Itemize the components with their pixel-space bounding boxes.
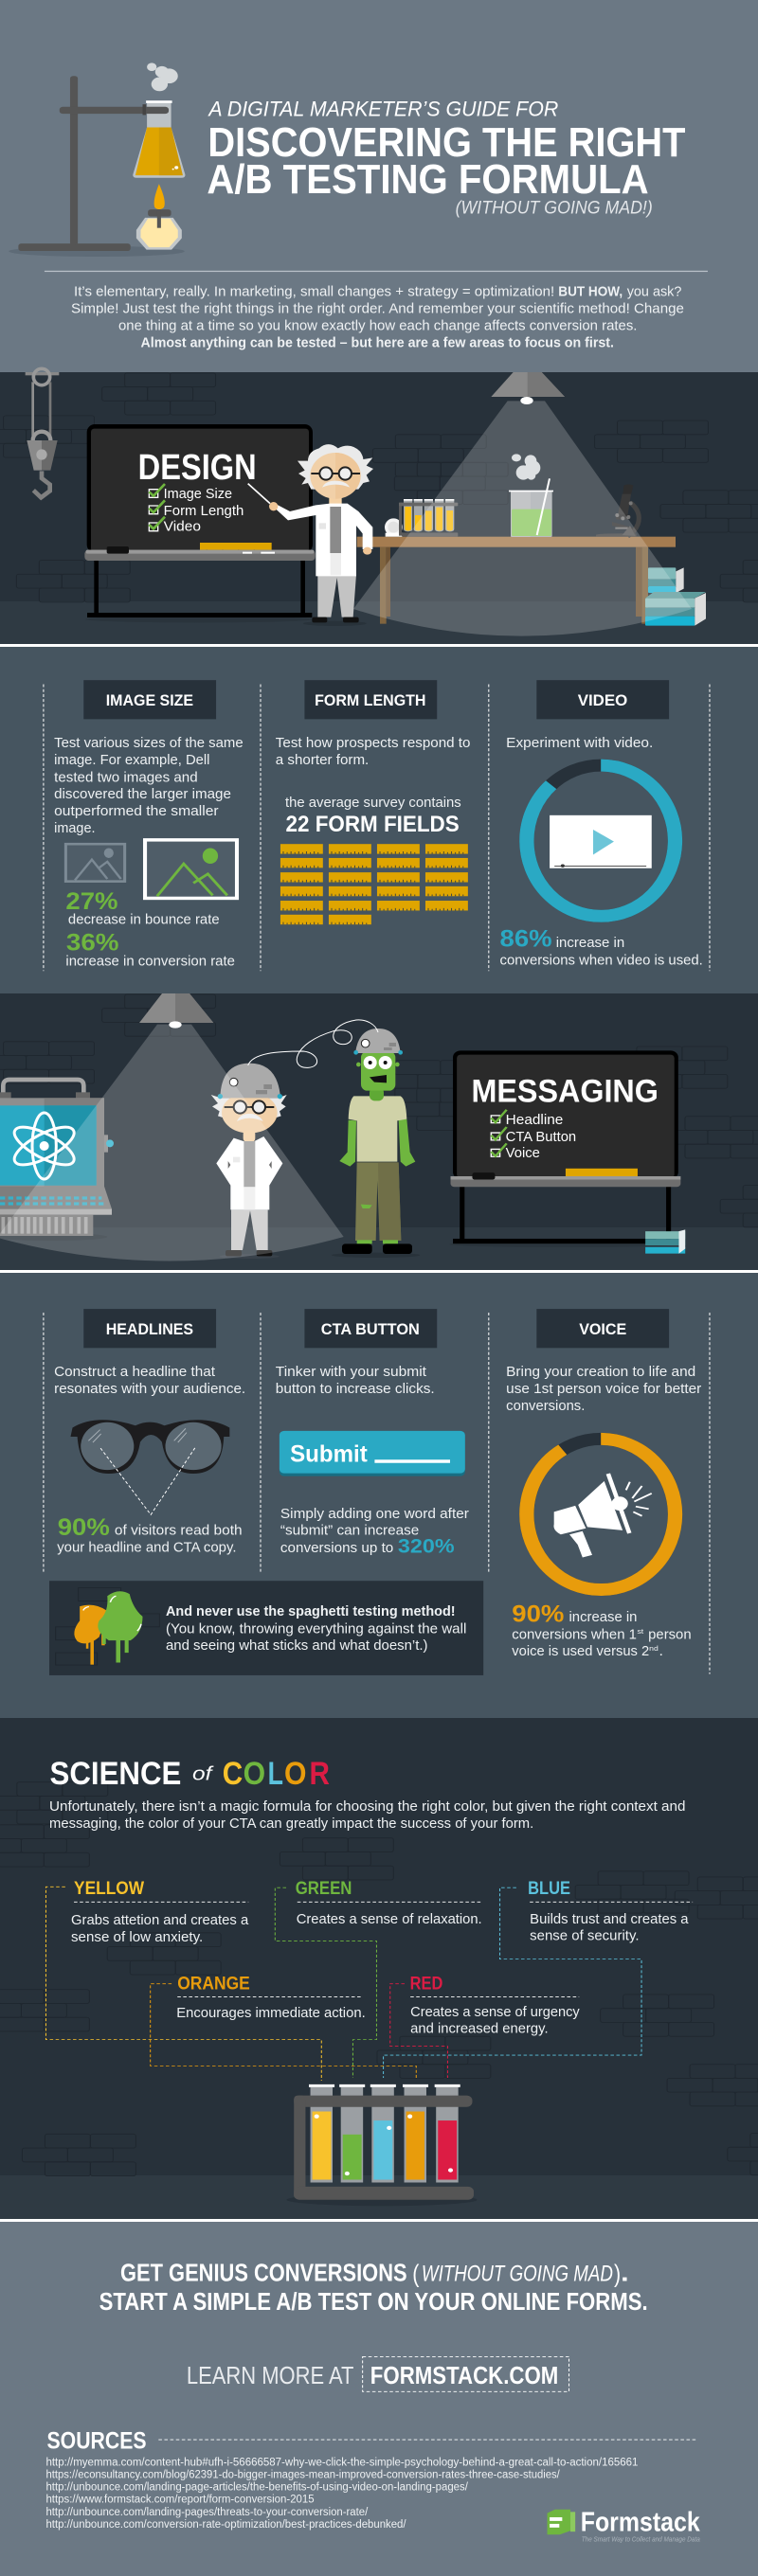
card: headlines xyxy=(54,1309,245,1555)
heading: science of color: R xyxy=(310,1756,330,1792)
card: image size: IMAGE SIZE xyxy=(106,690,193,709)
intro text: Simple! Just test the right things in the right order. And remember your scientific method! Change xyxy=(71,302,684,316)
scene: lab table, lamp and light xyxy=(353,372,706,636)
computer with atom screen xyxy=(0,1080,114,1241)
label: blue xyxy=(528,1879,693,1943)
color intro text: messaging, the color of your CTA can greatly impact the success of your form. xyxy=(49,1816,533,1832)
label: green xyxy=(296,1879,482,1927)
dashed column dividers xyxy=(44,1313,710,1674)
connector lines xyxy=(45,1887,641,2081)
label: red: Creates a sense of urgency xyxy=(410,2005,580,2020)
card: image size xyxy=(54,680,244,969)
intro text xyxy=(71,285,684,350)
card: voice: conversions. xyxy=(506,1399,585,1413)
icon: paint splats xyxy=(74,1591,143,1665)
label: yellow xyxy=(71,1879,249,1945)
title: A DIGITAL MARKETER’S GUIDE FOR xyxy=(208,98,558,121)
callout: spaghetti testing: And never use the spaghetti testing method! xyxy=(166,1604,456,1619)
science of color bricks xyxy=(0,1782,758,2176)
blackboard: design xyxy=(84,424,316,622)
card: video xyxy=(500,680,703,968)
intro text: It’s elementary, really. In marketing, small changes + strategy = optimization! xyxy=(74,285,554,299)
color intro text: Unfortunately, there isn’t a magic formula for choosing the right color, but given the right context and xyxy=(49,1799,685,1815)
card: cta button xyxy=(276,1309,469,1557)
sources: https://econsultancy.com/blog/62391-do-bigger-images-mean-improved-conversion-rates-three-case-studies/ xyxy=(45,2467,560,2480)
label: green: Creates a sense of relaxation. xyxy=(297,1912,482,1927)
ruler grid: 22 form fields xyxy=(280,844,468,924)
callout: spaghetti testing: (You know, throwing everything against the wall xyxy=(166,1621,466,1637)
learn more link: FORMSTACK.COM xyxy=(370,2362,558,2389)
icon: microscope xyxy=(596,484,639,537)
icon: flask on burner stand xyxy=(9,63,185,257)
blackboard: design: Video xyxy=(164,519,201,535)
card: image size: outperformed the smaller xyxy=(54,804,219,819)
icon: books xyxy=(645,1229,685,1254)
card: headlines: resonates with your audience. xyxy=(54,1382,245,1397)
title xyxy=(207,98,686,218)
label: yellow: sense of low anxiety. xyxy=(71,1930,203,1945)
card: voice xyxy=(506,1309,701,1659)
card: headlines: of visitors read both xyxy=(115,1524,243,1538)
label: blue: BLUE xyxy=(528,1879,570,1899)
call to action: WITHOUT GOING MAD xyxy=(422,2261,613,2286)
card: voice: voice is used versus 2 xyxy=(512,1644,649,1659)
sources: http://unbounce.com/landing-page-articles/the-benefits-of-using-video-on-landing-pages/ xyxy=(45,2479,468,2493)
card: image size: 36% xyxy=(66,929,119,956)
card: voice: VOICE xyxy=(579,1319,626,1338)
icon: small image xyxy=(65,844,125,882)
panel: messaging tests xyxy=(0,1309,758,2176)
sources: https://www.formstack.com/report/form-conversion-2015 xyxy=(45,2492,315,2505)
label: blue: sense of security. xyxy=(530,1929,639,1943)
card: image size: image. For example, Dell xyxy=(54,753,209,768)
logo: formstack xyxy=(548,2507,700,2543)
card: video: 86% xyxy=(500,925,552,952)
card: image size: 27% xyxy=(65,887,117,915)
test tube rack xyxy=(287,2084,478,2206)
card: voice: . xyxy=(659,1644,663,1659)
label: orange: ORANGE xyxy=(177,1974,250,1994)
test tubes on table xyxy=(399,499,458,537)
heading: science of color: O xyxy=(244,1756,265,1792)
learn more link: LEARN MORE AT xyxy=(187,2362,353,2389)
call to action: GET GENIUS CONVERSIONS xyxy=(120,2260,407,2287)
heading: science of color: C xyxy=(223,1756,243,1792)
card: headlines: 90% xyxy=(58,1513,110,1541)
header panel xyxy=(0,63,758,602)
label: red xyxy=(410,1974,580,2036)
card: cta button: 320% xyxy=(398,1534,455,1557)
card: video: Experiment with video. xyxy=(506,736,653,751)
icon: large image xyxy=(145,840,237,898)
card: voice: st xyxy=(637,1628,644,1636)
scientist with helmet xyxy=(211,1064,287,1259)
card: voice: 90% xyxy=(512,1601,564,1627)
card: image size: tested two images and xyxy=(54,770,198,785)
card: voice: conversions when 1 xyxy=(512,1627,637,1642)
card: image size: decrease in bounce rate xyxy=(68,912,220,927)
blackboard: messaging: Headline xyxy=(506,1111,563,1128)
panel: design tests xyxy=(0,680,758,1254)
card: headlines: Construct a headline that xyxy=(54,1365,216,1379)
blackboard: messaging: Voice xyxy=(506,1144,540,1161)
call to action: . xyxy=(621,2260,629,2287)
icon: atom xyxy=(9,1113,80,1179)
wires xyxy=(248,1020,378,1067)
card: voice: use 1st person voice for better xyxy=(506,1382,701,1397)
label: red: and increased energy. xyxy=(410,2022,549,2036)
heading: science of color: O xyxy=(284,1756,306,1792)
donut chart: 90% xyxy=(527,1439,676,1590)
heading: science of color xyxy=(50,1756,330,1792)
callout: spaghetti testing xyxy=(49,1581,483,1675)
icon: pulley hook xyxy=(26,368,59,497)
label: yellow: Grabs attetion and creates a xyxy=(71,1913,249,1928)
donut chart: 86% xyxy=(527,765,675,916)
icon: glasses xyxy=(70,1420,229,1514)
label: orange: Encourages immediate action. xyxy=(176,2006,366,2020)
submit button xyxy=(280,1431,465,1476)
logo: formstack: Formstack xyxy=(581,2507,700,2537)
zombie xyxy=(332,1029,420,1258)
card: cta button: “submit” can increase xyxy=(280,1524,419,1538)
logo: formstack: The Smart Way to Collect and Manage Data xyxy=(582,2535,700,2543)
blackboard: design: DESIGN xyxy=(138,448,257,488)
card: image size: increase in conversion rate xyxy=(65,955,235,969)
card: voice: Bring your creation to life and xyxy=(506,1365,695,1379)
scene: blackboard and scientist xyxy=(26,368,373,626)
scientist pointing xyxy=(248,444,373,626)
dashed column dividers xyxy=(44,684,710,971)
beaker with steam xyxy=(509,454,553,537)
callout: spaghetti testing: and seeing what sticks and what doesn’t.) xyxy=(166,1638,428,1654)
intro text: BUT HOW, xyxy=(558,285,623,299)
scene: messaging lab bricks xyxy=(0,994,758,1227)
card: form length: the average survey contains xyxy=(285,796,461,811)
label: orange xyxy=(176,1974,366,2020)
heading: science of color: L xyxy=(268,1756,283,1792)
card: cta button: CTA BUTTON xyxy=(321,1319,420,1338)
card: form length xyxy=(276,680,471,924)
card: image size: image. xyxy=(54,821,96,836)
card: form length: Test how prospects respond to xyxy=(276,736,471,751)
icon: desk clock xyxy=(385,518,403,537)
heading: science of color: SCIENCE xyxy=(50,1756,181,1792)
sources: http://myemma.com/content-hub#ufh-i-56666587-why-we-click-the-simple-psychology-behind-a-great-call-to-action/165661 xyxy=(45,2455,638,2468)
sources: http://unbounce.com/landing-pages/threats-to-your-conversion-rate/ xyxy=(45,2505,369,2518)
blackboard: design: Image Size xyxy=(164,486,232,502)
card: cta button: Tinker with your submit xyxy=(276,1365,427,1379)
card: image size: discovered the larger image xyxy=(54,787,231,802)
icon: megaphone xyxy=(553,1474,652,1557)
panel: color lab and footer xyxy=(45,1887,700,2543)
card: voice: nd xyxy=(649,1645,659,1653)
intro text: one thing at a time so you know exactly how each change affects conversion rates. xyxy=(118,319,637,333)
call to action: ) xyxy=(614,2261,621,2288)
card: voice: person xyxy=(648,1627,692,1642)
card: headlines: HEADLINES xyxy=(106,1319,193,1338)
blackboard: messaging: MESSAGING xyxy=(471,1073,659,1110)
scene: computer, scientist and zombie xyxy=(0,993,420,1261)
scene: design lab bricks xyxy=(0,373,758,602)
card: headlines: your headline and CTA copy. xyxy=(57,1541,236,1555)
lamp and light cone xyxy=(0,993,344,1261)
card: voice: increase in xyxy=(569,1610,637,1625)
card: image size: Test various sizes of the same xyxy=(54,736,244,751)
card: cta button: button to increase clicks. xyxy=(276,1382,435,1397)
intro text: Almost anything can be tested – but here are a few areas to focus on first. xyxy=(140,336,614,350)
label: green: GREEN xyxy=(296,1879,352,1899)
call to action: ( xyxy=(412,2261,420,2288)
call to action xyxy=(99,2260,648,2316)
blackboard: design: Form Length xyxy=(164,503,244,519)
learn more link xyxy=(187,2356,569,2391)
sources: http://unbounce.com/conversion-rate-optimization/best-practices-debunked/ xyxy=(45,2517,406,2531)
sources xyxy=(45,2427,696,2531)
card: video: conversions when video is used. xyxy=(500,953,703,968)
color intro text xyxy=(49,1799,685,1832)
submit button: Submit xyxy=(290,1440,368,1467)
card: cta button: conversions up to xyxy=(280,1541,394,1556)
label: red: RED xyxy=(410,1974,442,1994)
heading: science of color: of xyxy=(192,1762,214,1784)
lamp and light cone xyxy=(353,372,692,636)
title: (WITHOUT GOING MAD!) xyxy=(456,198,653,218)
card: cta button: Simply adding one word after xyxy=(280,1507,469,1522)
card: form length: 22 FORM FIELDS xyxy=(286,811,460,836)
card: video: increase in xyxy=(556,936,624,951)
blackboard: messaging: CTA Button xyxy=(506,1128,576,1145)
intro text: you ask? xyxy=(627,285,682,299)
card: form length: a shorter form. xyxy=(276,753,369,768)
card: form length: FORM LENGTH xyxy=(315,690,425,709)
icon: book stacks xyxy=(645,567,706,626)
title: A/B TESTING FORMULA xyxy=(207,156,649,203)
sources: SOURCES xyxy=(46,2427,147,2454)
card: video: VIDEO xyxy=(578,690,627,709)
blackboard: messaging xyxy=(449,1050,681,1247)
lab table xyxy=(357,537,676,624)
label: yellow: YELLOW xyxy=(74,1879,144,1899)
label: blue: Builds trust and creates a xyxy=(530,1912,689,1927)
